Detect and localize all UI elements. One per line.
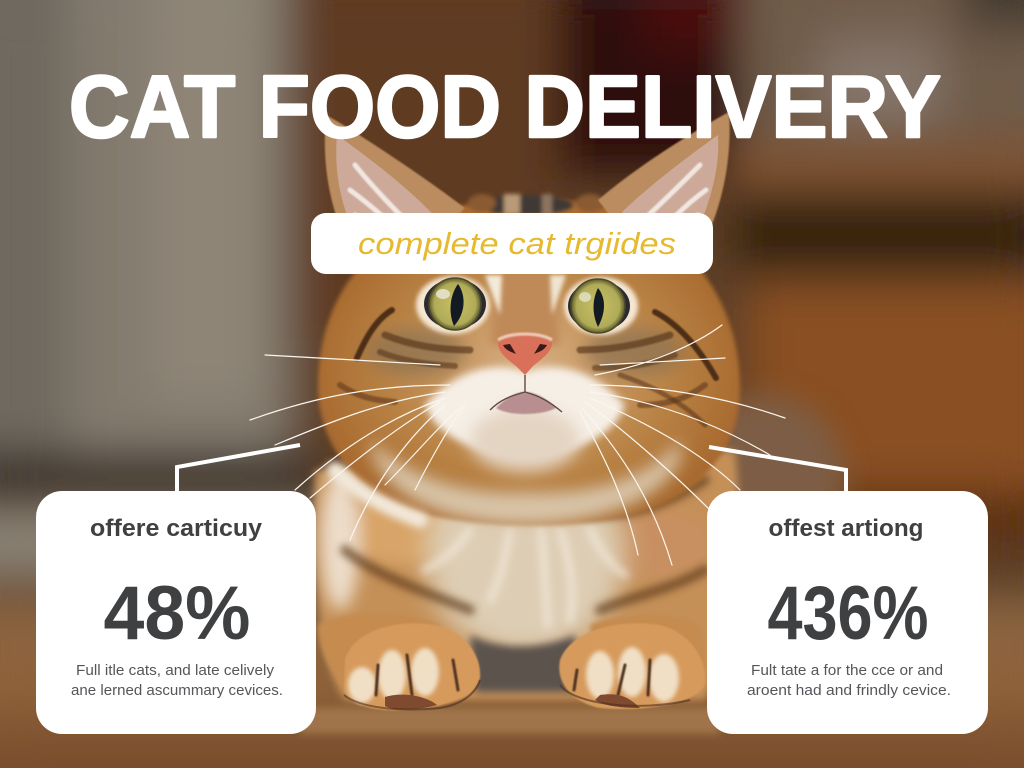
left front paw [344, 623, 480, 710]
white cheek streak [335, 470, 420, 520]
left arm [318, 613, 440, 690]
subtitle text: complete cat trgiides [358, 226, 676, 261]
subtitle pill [311, 213, 713, 274]
belly shadow between paws [470, 635, 580, 692]
mouth [496, 392, 556, 414]
forehead marking [468, 194, 604, 215]
right card heading: offest artiong [768, 515, 924, 542]
right card description: Fult tate a for the cce or and [751, 662, 943, 679]
cat back haunch [685, 395, 845, 565]
nose bridge [490, 275, 560, 345]
chin [470, 408, 580, 472]
floor foreground reflection [300, 708, 720, 734]
nose [498, 334, 552, 375]
title: CAT FOOD DELIVERY [69, 57, 941, 156]
right card description: aroent had and frindly cevice. [747, 682, 951, 699]
face tabby stripes [340, 310, 716, 425]
cat illustration [250, 112, 845, 710]
right card description [747, 662, 951, 699]
left paw toe gaps [376, 655, 458, 695]
right front paw [559, 623, 705, 709]
right arm [590, 614, 705, 690]
left card heading: offere carticuy [90, 515, 263, 542]
chest fur streaks [425, 520, 625, 625]
panel: right stat card [707, 491, 988, 734]
right ear [598, 112, 730, 270]
right card stat: 436% [768, 571, 928, 656]
right paw toe gaps [574, 660, 650, 695]
left ear [325, 115, 465, 270]
left ear fur [350, 165, 425, 262]
neck ruff [370, 440, 681, 525]
left card description: Full itle cats, and late celively [76, 662, 274, 679]
whiskers [250, 325, 785, 565]
panel: left stat card [36, 491, 316, 734]
body stripes [345, 480, 705, 610]
left card description [71, 662, 283, 699]
body side fur highlights [320, 470, 710, 610]
chest fur [425, 455, 625, 655]
cat body [314, 450, 739, 700]
connector: right callout [709, 447, 846, 491]
right ear fur [630, 165, 706, 262]
left card description: ane lerned ascummary cevices. [71, 682, 283, 699]
right eye [564, 277, 638, 335]
head [318, 199, 740, 526]
left card stat: 48% [104, 571, 250, 656]
left eye [416, 276, 490, 334]
connector: left callout [177, 445, 300, 491]
muzzle [425, 367, 625, 458]
cheek shading [365, 328, 685, 376]
